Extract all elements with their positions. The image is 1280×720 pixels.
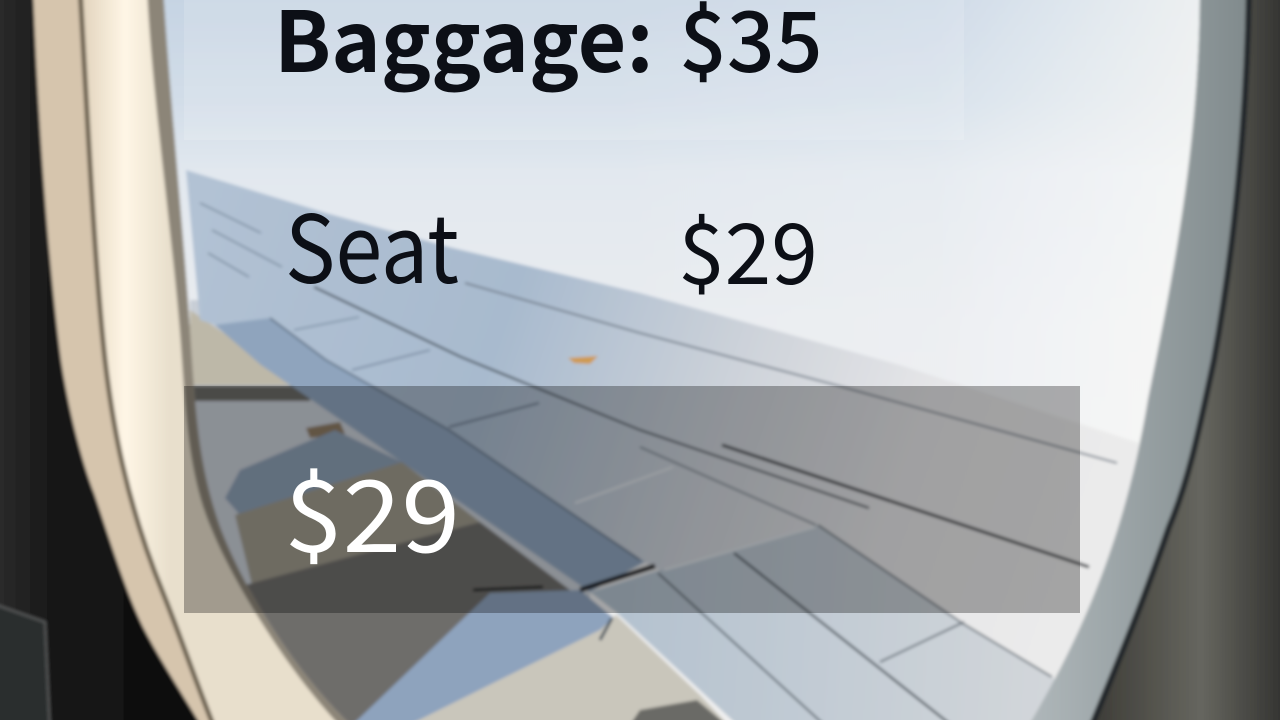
window frame: left dark wall (0, 0, 235, 720)
ground below the wing (190, 300, 590, 720)
value: seat fee: $29 (678, 188, 818, 309)
label: seat: Seat (285, 175, 459, 311)
lower flap (345, 590, 616, 720)
seat corner at lower left (0, 602, 50, 720)
panel: top highlight band (184, 0, 964, 140)
window frame: cream trim (80, 0, 358, 720)
window frame: right grey bezel (1025, 0, 1250, 720)
row: baggage fee (274, 0, 823, 97)
window frame: thin seam (80, 0, 216, 720)
window frame: right dark wall (1090, 0, 1280, 720)
value: highlighted total: $29 (284, 436, 460, 581)
wing leading edge (215, 318, 645, 592)
wing flaps (590, 525, 1056, 720)
wing lines (200, 203, 1117, 720)
wing surface (186, 170, 1160, 680)
row: seat fee (285, 175, 818, 311)
window frame: left tan band (33, 0, 225, 720)
window frame: right dark seam (1089, 0, 1249, 720)
panel: dark band for the bottom row (184, 386, 1080, 613)
orange wing marking (568, 356, 598, 364)
window frame: inner grey seal (147, 0, 358, 720)
lower beige wing body (395, 615, 735, 720)
